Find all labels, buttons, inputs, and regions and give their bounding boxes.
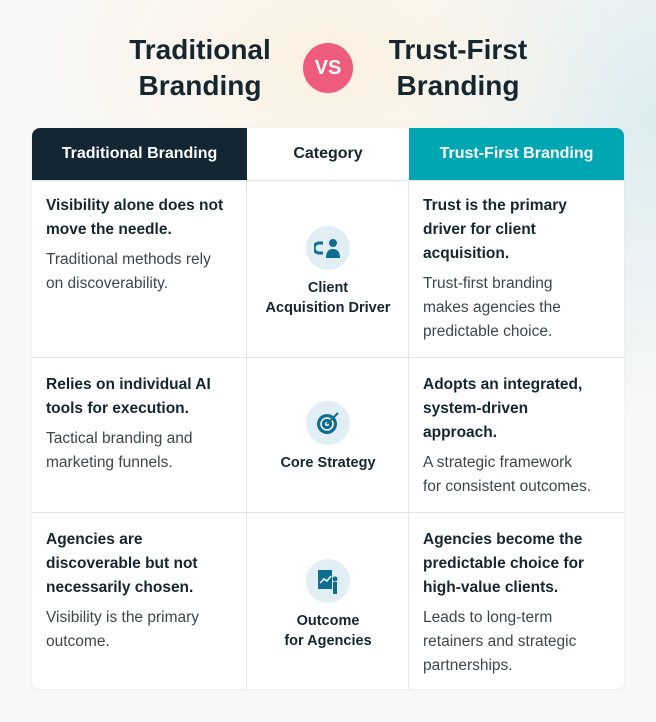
row 1 traditional: Traditional methods rely bbox=[46, 251, 211, 268]
title: trust-first branding: Branding bbox=[397, 70, 519, 101]
title: trust-first branding bbox=[389, 34, 527, 101]
row 1 traditional: on discoverability. bbox=[46, 275, 168, 292]
row 2 trust-first bbox=[423, 376, 591, 495]
row 3 trust-first: predictable choice for bbox=[423, 555, 584, 572]
row 1 trust-first: Trust-first branding bbox=[423, 275, 552, 292]
row 1 category: Acquisition Driver bbox=[266, 300, 390, 316]
row 3 trust-first: retainers and strategic bbox=[423, 633, 576, 650]
header: trust-first: Trust-First Branding bbox=[440, 145, 593, 162]
row 2 traditional bbox=[46, 376, 211, 471]
row 3 category bbox=[284, 559, 372, 649]
row 2 trust-first: Adopts an integrated, bbox=[423, 376, 582, 393]
row 2 traditional: marketing funnels. bbox=[46, 454, 173, 471]
row 2 trust-first: for consistent outcomes. bbox=[423, 478, 591, 495]
row 1 trust-first: acquisition. bbox=[423, 245, 509, 262]
title: trust-first branding: Trust-First bbox=[389, 34, 527, 65]
row 3 trust-first bbox=[423, 531, 584, 674]
row 1 trust-first: Trust is the primary bbox=[423, 197, 567, 214]
row 1 traditional bbox=[46, 197, 223, 292]
title: traditional branding: Branding bbox=[139, 70, 261, 101]
row 3 trust-first: high-value clients. bbox=[423, 579, 558, 596]
row 2 category: Core Strategy bbox=[280, 455, 376, 471]
row 2 traditional: Relies on individual AI bbox=[46, 376, 211, 393]
vs badge: VS bbox=[315, 57, 341, 79]
row 1 trust-first: makes agencies the bbox=[423, 299, 561, 316]
row 3 trust-first: partnerships. bbox=[423, 657, 513, 674]
row 2 trust-first: approach. bbox=[423, 424, 497, 441]
row 1 category: Client bbox=[308, 280, 348, 296]
header: traditional bbox=[32, 128, 247, 180]
row 2 traditional: Tactical branding and bbox=[46, 430, 192, 447]
row 2 trust-first: system-driven bbox=[423, 400, 528, 417]
row 2 traditional: tools for execution. bbox=[46, 400, 189, 417]
comparison table bbox=[32, 128, 624, 689]
row 1 category bbox=[266, 226, 390, 316]
row 3 category: Outcome bbox=[297, 613, 359, 629]
header: traditional: Traditional Branding bbox=[62, 145, 217, 162]
row 1 trust-first bbox=[423, 197, 567, 340]
title: traditional branding bbox=[129, 34, 271, 101]
row 1 trust-first: predictable choice. bbox=[423, 323, 552, 340]
header: category: Category bbox=[293, 145, 363, 162]
row 3 trust-first: Agencies become the bbox=[423, 531, 582, 548]
row 3 traditional: Visibility is the primary bbox=[46, 609, 199, 626]
row 1 trust-first: driver for client bbox=[423, 221, 536, 238]
row 3 category: for Agencies bbox=[284, 633, 372, 649]
header: trust-first bbox=[409, 128, 624, 180]
row 2 category bbox=[280, 401, 376, 471]
row 1 traditional: move the needle. bbox=[46, 221, 172, 238]
row 1 traditional: Visibility alone does not bbox=[46, 197, 223, 214]
row 2 trust-first: A strategic framework bbox=[423, 454, 572, 471]
row 3 traditional: discoverable but not bbox=[46, 555, 198, 572]
vs badge bbox=[303, 43, 353, 93]
row 3 trust-first: Leads to long-term bbox=[423, 609, 552, 626]
title: traditional branding: Traditional bbox=[129, 34, 271, 65]
row 3 traditional: necessarily chosen. bbox=[46, 579, 193, 596]
row 3 traditional: Agencies are bbox=[46, 531, 142, 548]
row 3 traditional: outcome. bbox=[46, 633, 110, 650]
row 3 traditional bbox=[46, 531, 199, 650]
